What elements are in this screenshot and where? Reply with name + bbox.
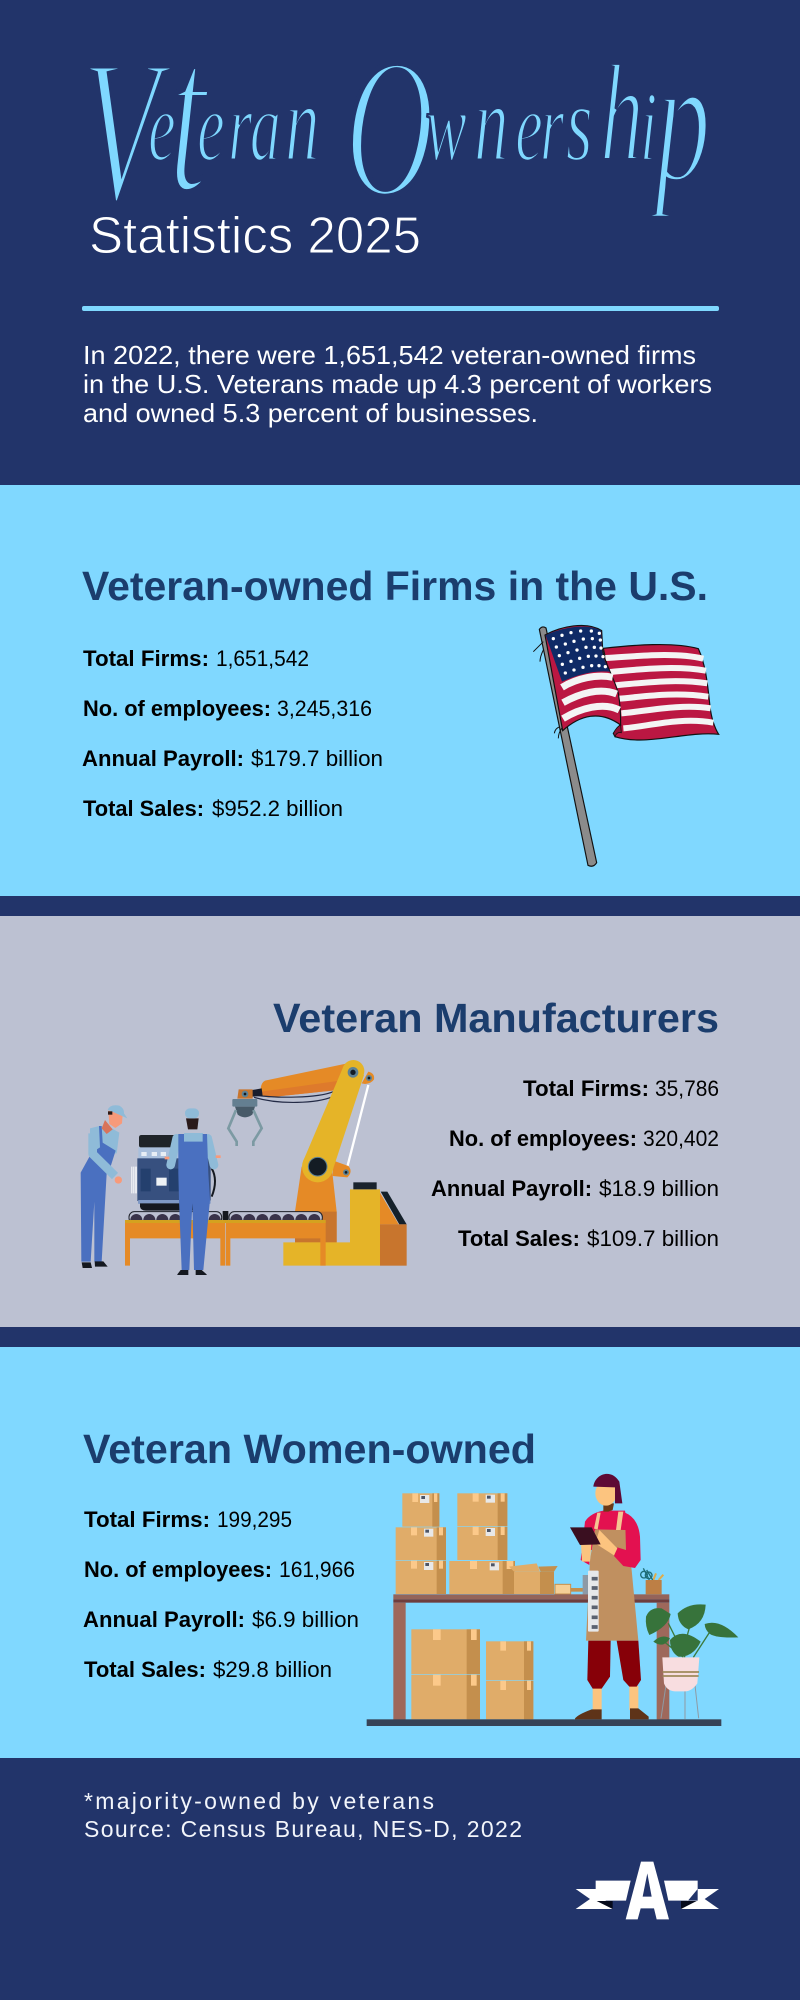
floor: [367, 1719, 721, 1726]
stat: total firms: [84, 1507, 292, 1532]
worker right: [165, 1108, 221, 1275]
logo: winged letter A: [576, 1862, 719, 1919]
table: [393, 1594, 669, 1720]
worker left: [81, 1105, 127, 1268]
intro paragraph: [83, 340, 712, 428]
divider band: [0, 896, 800, 916]
title: Veteran Ownership: p: [648, 21, 711, 220]
stat: total firms: 1,651,542: [216, 646, 309, 671]
stat: annual payroll: [431, 1176, 719, 1201]
stat: total firms: [83, 646, 309, 671]
footnote and source: *majority-owned by veterans: [84, 1788, 434, 1814]
stat: annual payroll: Annual Payroll:: [83, 1607, 245, 1632]
stacked boxes on table: [396, 1493, 515, 1594]
stat: total sales: Total Sales:: [84, 1657, 206, 1682]
title: Veteran Ownership: e: [197, 71, 225, 182]
footnote and source: [84, 1788, 522, 1842]
title: Veteran Ownership: r: [540, 71, 565, 182]
subtitle: Statistics 2025: Statistics 2025: [89, 207, 421, 265]
stat: employees: [84, 1557, 355, 1582]
intro paragraph: in the U.S. Veterans made up 4.3 percent of workers: [83, 369, 712, 399]
stat: total sales: Total Sales:: [458, 1226, 580, 1251]
potted plant: [646, 1604, 738, 1719]
woman: [570, 1474, 649, 1719]
stat: annual payroll: [82, 746, 383, 771]
stat: employees: No. of employees:: [449, 1126, 637, 1151]
engine machine: [131, 1135, 215, 1211]
stat: total sales: [84, 1657, 332, 1682]
title: Veteran Ownership: e: [148, 71, 176, 182]
panel: veteran women-owned: [0, 1347, 800, 1758]
stat: annual payroll: $18.9 billion: [599, 1176, 719, 1201]
heading: Veteran Women-owned: Veteran Women-owned: [83, 1426, 536, 1472]
title: Veteran Ownership: h: [600, 36, 644, 191]
stat: total sales: $952.2 billion: [212, 796, 343, 821]
title: Veteran Ownership: n: [474, 61, 508, 184]
stat: annual payroll: Annual Payroll:: [431, 1176, 592, 1201]
heading: Veteran Manufacturers: Veteran Manufacturers: [273, 995, 719, 1041]
title: Veteran Ownership: w: [425, 71, 467, 182]
panel: intro header: [0, 0, 800, 485]
stat: total sales: [83, 796, 343, 821]
stat: total sales: Total Sales:: [83, 796, 204, 821]
panel: veteran-owned firms: [0, 485, 800, 896]
illustration: woman at warehouse table with boxes: [367, 1474, 738, 1726]
title: Veteran Ownership: r: [228, 71, 253, 182]
stat: employees: 3,245,316: [277, 696, 372, 721]
stat: total firms: Total Firms:: [84, 1507, 210, 1532]
stat: employees: 161,966: [279, 1557, 355, 1582]
panel: footer: [0, 1758, 800, 2000]
title: Veteran Ownership: n: [285, 61, 336, 184]
stat: employees: No. of employees:: [83, 696, 271, 721]
panel: veteran manufacturers: [0, 916, 800, 1327]
stat: annual payroll: Annual Payroll:: [82, 746, 244, 771]
title: Veteran Ownership: V: [82, 17, 172, 244]
title: Veteran Ownership: a: [250, 71, 281, 182]
open box: [509, 1563, 558, 1594]
divider band: [0, 1327, 800, 1347]
intro paragraph: and owned 5.3 percent of businesses.: [83, 398, 538, 428]
stat: annual payroll: [83, 1607, 359, 1632]
stat: total firms: Total Firms:: [523, 1076, 649, 1101]
stat: employees: [83, 696, 372, 721]
stat: annual payroll: $179.7 billion: [251, 746, 383, 771]
stat: total firms: 35,786: [655, 1076, 719, 1101]
stat: employees: 320,402: [643, 1126, 719, 1151]
heading: Veteran-owned Firms in the U.S.: Veteran-owned Firms in the U.S.: [82, 563, 708, 609]
robot arm: [228, 1060, 407, 1266]
conveyor tables: [125, 1211, 326, 1266]
illustration: workers and robot arm assembly line: [81, 1060, 407, 1275]
boxes under table: [411, 1629, 533, 1719]
intro paragraph: In 2022, there were 1,651,542 veteran-owned firms: [83, 340, 696, 370]
stat: total sales: $29.8 billion: [213, 1657, 332, 1682]
divider rule: [82, 306, 719, 311]
stat: total sales: $109.7 billion: [587, 1226, 719, 1251]
title: Veteran Ownership: i: [640, 71, 657, 182]
tape dispenser: [555, 1575, 609, 1594]
stat: total firms: [523, 1076, 719, 1101]
title: Veteran Ownership: O: [345, 17, 434, 238]
stat: total firms: Total Firms:: [83, 646, 209, 671]
stat: total sales: [458, 1226, 719, 1251]
title: Veteran Ownership: s: [566, 61, 593, 184]
footnote and source: Source: Census Bureau, NES-D, 2022: [84, 1816, 522, 1842]
pencil holder: [641, 1568, 663, 1594]
stat: employees: No. of employees:: [84, 1557, 272, 1582]
title: Veteran Ownership: t: [169, 0, 210, 238]
stat: total firms: 199,295: [217, 1507, 292, 1532]
title: Veteran Ownership: e: [515, 71, 543, 182]
stat: annual payroll: $6.9 billion: [252, 1607, 359, 1632]
icon: american flag: [533, 625, 719, 866]
